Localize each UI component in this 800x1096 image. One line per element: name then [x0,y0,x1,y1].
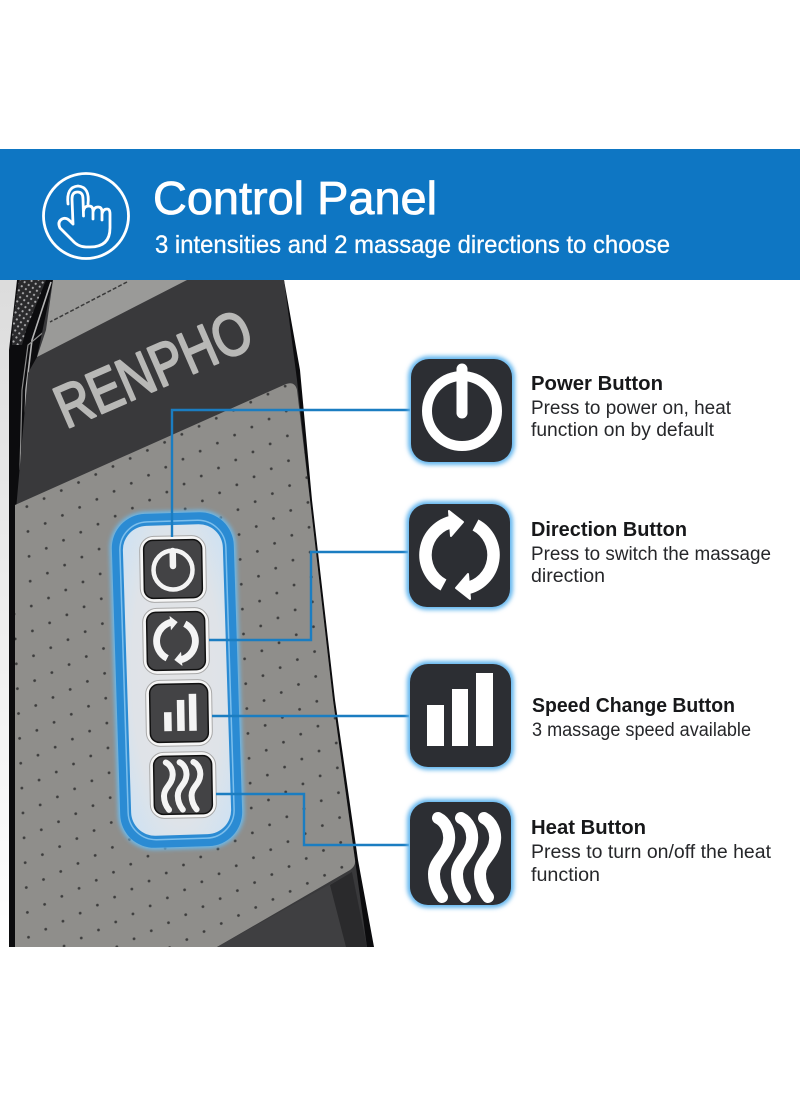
item: power button: function on by default [531,420,715,441]
subheading: 3 intensities and 2 massage directions to choose [155,231,670,259]
photo: massager device [0,280,374,947]
connector lines [172,410,410,845]
item: speed change button: 3 massage speed available [532,720,751,741]
button: direction small [142,607,210,675]
item: direction button: Direction Button [531,519,687,541]
item: power button: Press to power on, heat [531,398,732,419]
item: direction button: direction [531,566,605,587]
control strip on device [109,509,245,851]
item: heat button: function [531,865,600,886]
grey perforated panel [15,383,355,947]
icon: direction [406,501,513,610]
item: direction button: Press to switch the massage [531,544,771,565]
icon: hand pressing [44,174,128,258]
button: power small [139,535,207,603]
icon: speed bars [407,661,514,770]
item: speed change button: Speed Change Button [532,695,735,717]
icon: power [408,356,515,465]
heading: Control Panel [153,172,437,224]
item: heat button: Press to turn on/off the heat [531,842,772,863]
logo: RENPHO: RENPHO [44,297,262,441]
item: heat button: Heat Button [531,817,646,839]
item: heat button [407,799,772,908]
button: speed small [145,679,213,747]
item: speed change button [407,661,751,770]
item: power button [408,356,732,465]
item: power button: Power Button [531,373,663,395]
banner [0,149,800,280]
button: heat small [149,751,217,819]
item: direction button [406,501,771,610]
icon: heat waves [407,799,514,908]
